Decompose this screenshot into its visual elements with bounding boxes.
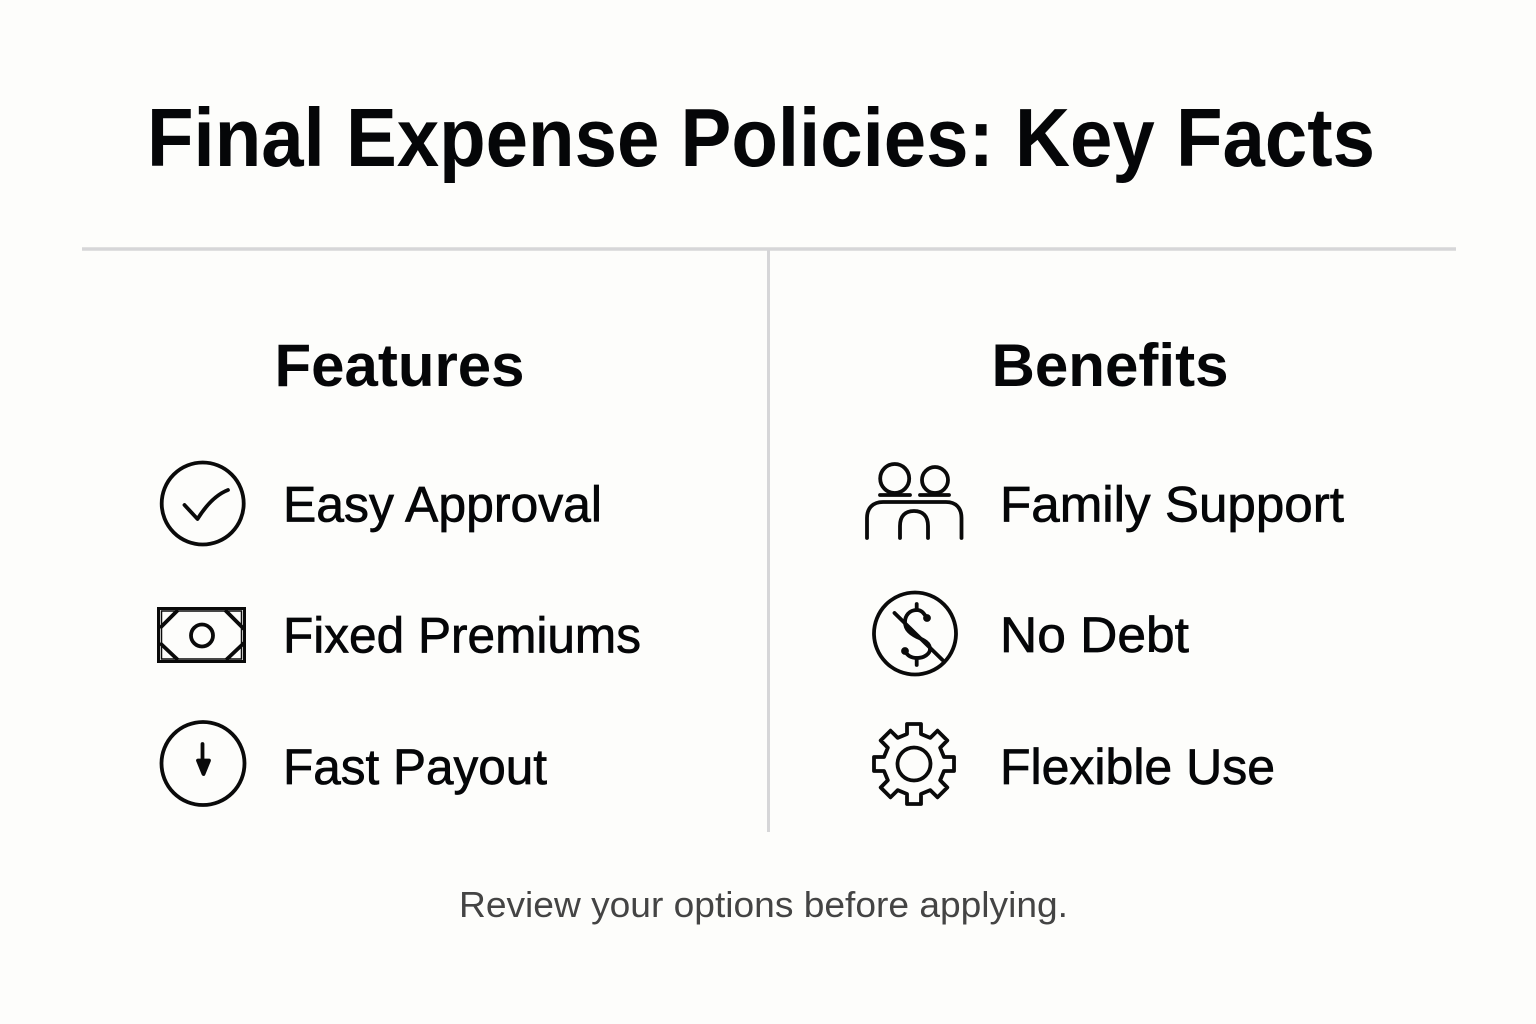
text: no debt: No Debt bbox=[1000, 607, 1189, 663]
icon: gear bbox=[874, 724, 954, 804]
heading: benefits: Benefits bbox=[992, 332, 1228, 399]
text: fast payout: Fast Payout bbox=[283, 739, 547, 795]
title: Final Expense Policies: Key Facts bbox=[147, 91, 1375, 184]
panel: features bbox=[158, 332, 641, 805]
text: fixed premiums: Fixed Premiums bbox=[283, 608, 641, 664]
heading: features: Features bbox=[274, 332, 524, 399]
text: easy approval: Easy Approval bbox=[283, 476, 602, 532]
icon: no dollar bbox=[874, 592, 956, 674]
text: flexible use: Flexible Use bbox=[1000, 739, 1275, 795]
icon: banknote bbox=[158, 608, 244, 662]
icon: check circle bbox=[162, 462, 244, 544]
icon: clock with arrow bbox=[162, 722, 244, 805]
icon: family bbox=[867, 464, 962, 538]
panel: benefits bbox=[867, 332, 1344, 804]
footer note: Review your options before applying. bbox=[459, 884, 1068, 925]
text: family support: Family Support bbox=[1000, 476, 1344, 532]
